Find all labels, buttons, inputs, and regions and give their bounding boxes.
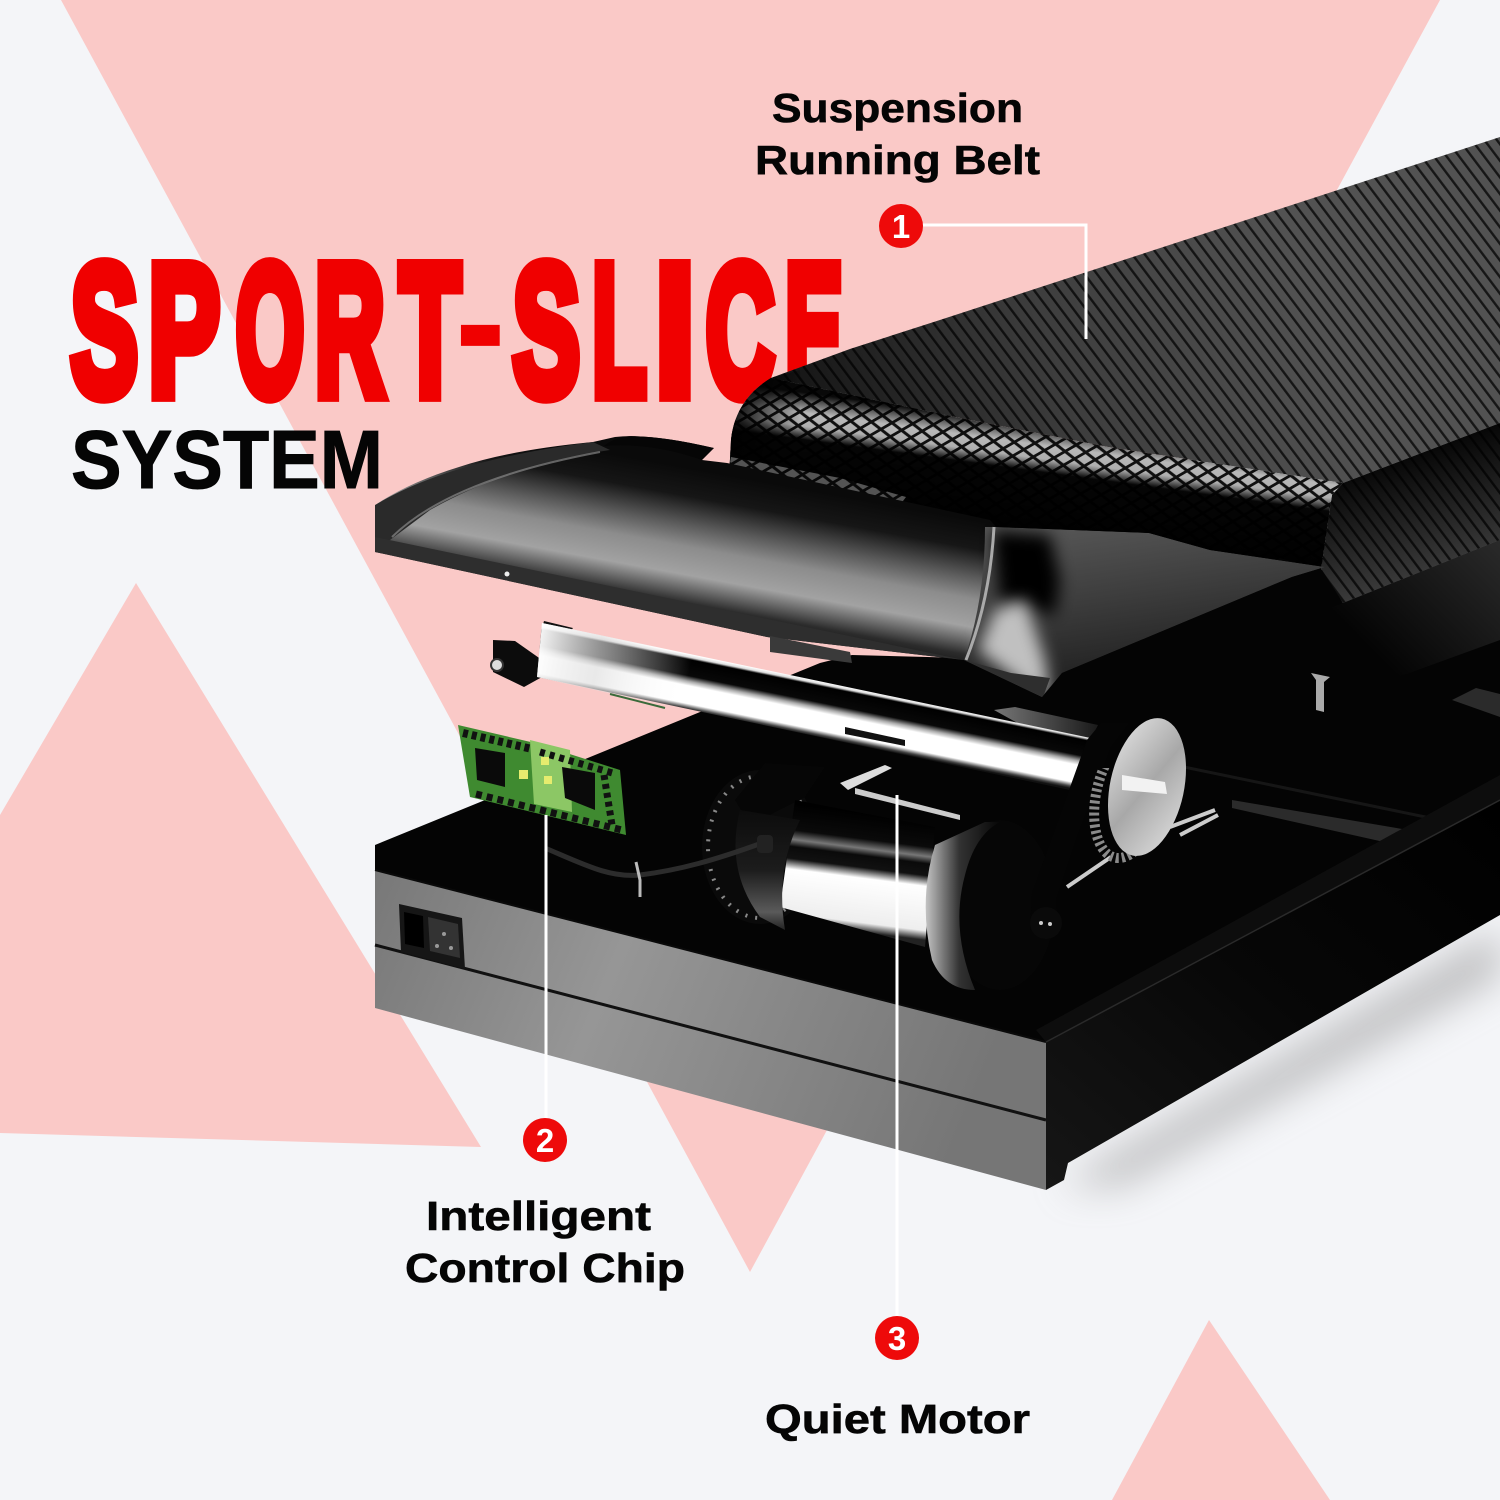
callout 2 leader line [544,815,548,1118]
cowl flap dark fold [992,530,1060,615]
cowl left end shade [375,442,610,545]
cowl flap bright fold [978,600,1050,695]
roller body [537,623,1100,790]
callout 2 badge [523,1118,567,1162]
title [71,222,843,506]
title: sport-slice: R [315,228,385,435]
threads [1089,768,1137,863]
callout 3: quiet motor [765,795,1030,1442]
callout 3 badge [875,1316,919,1360]
belt strip [1030,722,1130,935]
frame rails [1232,688,1500,842]
upper right body shading [1300,540,1500,680]
belt nose left shading [729,370,800,478]
callout 2 label: Control Chip [405,1245,685,1291]
callout 1 label: Suspension [772,85,1023,131]
cowl right flap [964,527,1325,697]
title: sport-slice: - [455,222,506,418]
callout 3 badge: 3 [888,1320,906,1357]
cowl dot [504,572,510,576]
pulley shaft [1122,775,1167,794]
title: sport-slice: C [706,227,775,435]
base side panel [1036,775,1500,1190]
motor bracket sliver [840,765,892,790]
callout 2: intelligent control chip [405,815,685,1291]
cowl lower band [375,537,1050,700]
treadmill illustration [370,137,1500,1190]
callout 3 label: Quiet Motor [765,1396,1030,1442]
belt side shading [1320,423,1500,603]
roller end bracket [493,640,542,687]
cowl main surface [375,436,996,660]
belt top shading [771,137,1500,483]
callout 2 label [405,1193,685,1291]
motor end band [736,810,800,930]
screw [1311,673,1330,712]
motor rod [855,788,960,820]
callout 1 badge: 1 [892,208,910,245]
callout 2 badge: 2 [536,1122,554,1159]
rods [1067,810,1218,887]
rail line [1184,767,1440,820]
motor front ring [926,822,1000,990]
callout 1 leader line [922,225,1086,339]
callout 3 leader line [896,795,898,1316]
control chip [458,725,626,835]
title: sport-slice: P [148,227,220,435]
pulley assembly [1039,718,1219,926]
roller highlight [537,623,700,711]
roller tab [542,621,573,632]
title: sport-slice: L [592,226,647,434]
belt nose lower texture [729,457,906,505]
encoder disc [702,763,825,924]
motor [545,763,1055,990]
belt pivot [1030,907,1062,939]
title: sport-slice: E [785,225,843,434]
wire [545,843,762,875]
callout 1 label [755,85,1040,183]
belt side face [1320,423,1500,603]
belt nose texture [729,378,1343,577]
lower frame body [375,540,1500,1042]
title: sport-slice: T [400,226,461,434]
chrome roller [491,621,1100,790]
motor front disc [945,820,1055,990]
title: sport-slice: S [71,225,138,434]
wire connector [757,835,773,853]
callout 2 label: Intelligent [426,1193,651,1239]
cowl seam [966,527,994,660]
motor body [780,800,935,947]
title: sport-slice: S [513,225,580,434]
title: sport-slice [71,222,843,435]
title: sport-slice: O [236,226,304,434]
belt top surface [771,137,1500,483]
title: system: SYSTEM [71,413,383,506]
base front panel [375,870,1046,1190]
title: sport-slice: I [655,226,695,434]
belt nose shading [729,378,1343,577]
cowl cover [370,430,1325,710]
callout 1 label: Running Belt [755,137,1040,183]
bottom pink triangle [1112,1320,1330,1500]
pulley disc [1096,711,1198,863]
cowl lower tab [770,636,852,663]
left pink triangle [0,583,481,1147]
grey wedge behind roller [994,707,1098,745]
roller bolt [491,659,503,671]
wire clip [636,862,640,897]
cowl hook [626,436,714,460]
roller green streak [610,694,665,708]
callout 1: suspension running belt [755,85,1086,339]
power socket [399,904,465,969]
side shadow [1060,930,1500,1185]
cowl front highlight line [392,452,600,537]
running belt deck [729,137,1500,603]
large pink triangle [61,0,1440,1272]
roller dark streak [845,727,905,746]
callout 1 badge [879,204,923,248]
